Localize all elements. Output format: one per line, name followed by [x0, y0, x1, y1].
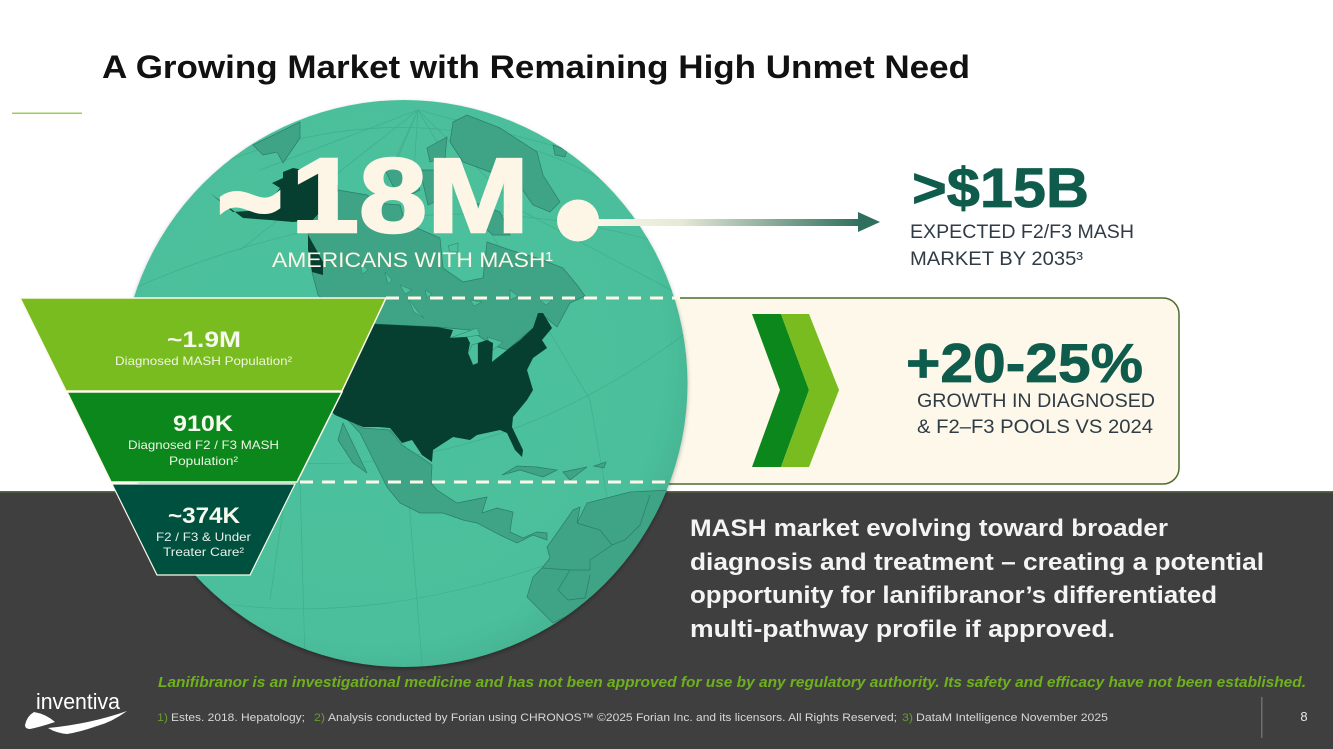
funnel tier 3: F2 / F3 & Under	[156, 530, 251, 544]
funnel tier 1: ~1.9M	[167, 327, 241, 352]
footnotes: DataM Intelligence November 2025	[916, 712, 1108, 724]
funnel tier 2	[67, 392, 342, 482]
body text: MASH market evolving toward broader	[690, 515, 1168, 542]
body text: diagnosis and treatment – creating a potential	[690, 549, 1264, 576]
market description	[910, 222, 1134, 270]
land: Iceland	[553, 145, 567, 157]
land: Mexico and Central America	[338, 417, 680, 623]
headline caption: AMERICANS WITH MASH¹	[272, 248, 553, 272]
panel: growth	[500, 298, 1179, 484]
land: Canada	[253, 115, 585, 350]
body text: multi-pathway profile if approved.	[690, 616, 1115, 643]
land: Caribbean	[502, 466, 557, 477]
funnel tier 1	[20, 298, 386, 391]
headline stat: 18M: ~	[218, 139, 282, 264]
market value: >$15B	[912, 156, 1089, 219]
land: Greenland	[450, 115, 560, 212]
icon: double chevron	[752, 314, 839, 467]
page number	[1261, 697, 1308, 738]
market description: EXPECTED F2/F3 MASH	[910, 222, 1134, 243]
dark lower band	[0, 491, 1333, 749]
headline stat: 18M: 18M	[291, 137, 529, 255]
footnotes: Estes. 2018. Hepatology;	[171, 712, 305, 724]
funnel tier 1: Diagnosed MASH Population²	[115, 354, 292, 368]
footnotes: Analysis conducted by Forian using CHRONOS™ ©2025 Forian Inc. and its licensors. All Rights Reserved;	[328, 712, 897, 724]
land: Arctic islands	[375, 137, 510, 235]
dashed connector lines	[300, 298, 680, 482]
body text	[690, 515, 1264, 643]
market description: MARKET BY 2035³	[910, 249, 1083, 270]
logo: inventiva	[25, 689, 127, 734]
headline stat: 18M	[218, 137, 553, 272]
globe	[120, 100, 700, 700]
graticule	[130, 110, 700, 700]
funnel tier 3: ~374K	[168, 503, 240, 528]
title accent line	[12, 112, 82, 114]
funnel tier 2: Diagnosed F2 / F3 MASH	[128, 438, 279, 452]
footnotes	[157, 712, 1108, 724]
land: Siberia	[253, 122, 300, 163]
page number: 8	[1300, 709, 1308, 724]
lakes	[360, 243, 552, 365]
growth value: +20-25%	[906, 332, 1143, 394]
funnel tier 2: Population²	[169, 454, 238, 468]
funnel tier 3: Treater Care²	[163, 545, 244, 559]
footnotes: 3)	[902, 712, 913, 724]
funnel tier 2: 910K	[173, 411, 233, 436]
regulatory disclaimer: Lanifibranor is an investigational medicine and has not been approved for use by any regulatory authority. Its safety and efficacy have not been established.	[158, 675, 1306, 691]
land: United States	[210, 168, 552, 462]
land: South America borders	[542, 495, 650, 600]
funnel	[20, 298, 386, 575]
growth description: GROWTH IN DIAGNOSED	[917, 391, 1155, 412]
arrow	[557, 200, 880, 242]
funnel tier 3	[112, 484, 295, 575]
land: South America	[527, 490, 680, 623]
growth description: & F2–F3 POOLS VS 2024	[917, 417, 1153, 438]
body text: opportunity for lanifibranor’s differentiated	[690, 582, 1217, 609]
growth description	[917, 391, 1155, 438]
land: Alaska	[210, 168, 338, 222]
land: Alaska panhandle	[308, 235, 323, 275]
footnotes: 2)	[314, 712, 325, 724]
footnotes: 1)	[157, 712, 168, 724]
title: A Growing Market with Remaining High Unmet Need	[102, 49, 970, 85]
logo: inventiva: inventiva	[36, 689, 121, 714]
